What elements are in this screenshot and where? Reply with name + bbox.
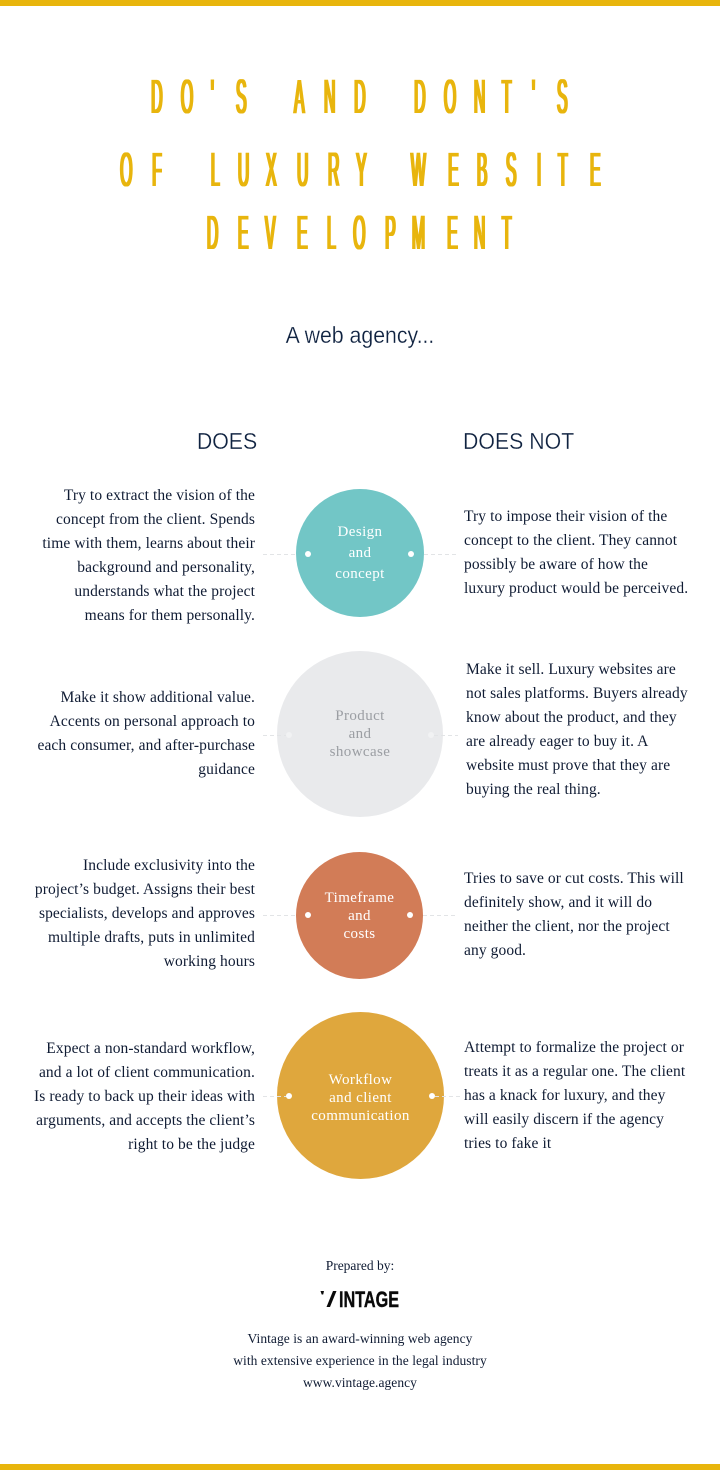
subtitle: A web agency... (286, 322, 434, 348)
row 2 right text (466, 661, 688, 798)
row 3 left text: multiple drafts, puts in unlimited (48, 929, 255, 946)
title: OFLUXURYWEBSITE (120, 143, 601, 197)
row 4 right text: Attempt to formalize the project or (464, 1039, 684, 1056)
row 1 circle: and (349, 545, 371, 561)
footer text: Vintage is an award-winning web agency (248, 1331, 472, 1346)
heading: does: DOES (197, 428, 257, 454)
row 2 circle (277, 651, 443, 817)
row 4 left text: arguments, and accepts the client’s (36, 1112, 255, 1129)
row 2 circle: Product (335, 708, 385, 724)
row 4 right text: tries to fake it (464, 1135, 551, 1152)
row 3 left text (35, 857, 255, 970)
prepared by: Prepared by: (326, 1258, 394, 1273)
row 1 right text: luxury product would be perceived. (464, 580, 688, 597)
row 3 circle: and (348, 908, 371, 924)
row 3 right text: any good. (464, 942, 526, 959)
row 4 right text: will easily discern if the agency (464, 1111, 664, 1128)
row 4 circle: communication (311, 1108, 410, 1124)
row 2 left text: Accents on personal approach to (50, 713, 255, 730)
row 4 right text: has a knack for luxury, and they (464, 1087, 665, 1104)
row 2 left text: guidance (198, 761, 255, 778)
row 2 right text: buying the real thing. (466, 781, 601, 798)
row 3 right text: definitely show, and it will do (464, 894, 652, 911)
row 3 left text: Include exclusivity into the (83, 857, 255, 874)
row 3 circle (296, 852, 423, 979)
row 1 right text: possibly be aware of how the (464, 556, 648, 573)
row 4 circle: Workflow (329, 1072, 392, 1088)
row 2 left text: each consumer, and after-purchase (37, 737, 255, 754)
row 2 circle: and (349, 726, 371, 742)
top bar (0, 0, 720, 6)
title (120, 70, 601, 260)
row 1 right text: concept to the client. They cannot (464, 532, 677, 549)
row 1 circle (296, 489, 424, 617)
row 3 circle: Timeframe (325, 890, 394, 906)
row 4 right text: treats it as a regular one. The client (464, 1063, 685, 1080)
row 4 left text: Expect a non-standard workflow, (46, 1040, 255, 1057)
footer text: www.vintage.agency (303, 1375, 417, 1390)
row 4 left text (34, 1040, 255, 1153)
row 3 left text: working hours (164, 953, 255, 970)
row 3 right text: Tries to save or cut costs. This will (464, 870, 684, 887)
row 1 right text (464, 508, 688, 597)
row 2 right text: are already eager to buy it. A (466, 733, 648, 750)
row 2 left text (37, 689, 255, 778)
row 1 left text: time with them, learns about their (42, 535, 255, 552)
row 3 right text: neither the client, nor the project (464, 918, 670, 935)
footer text: with extensive experience in the legal industry (233, 1353, 487, 1368)
row 2 right text: website must prove that they are (466, 757, 670, 774)
row 1 left text: concept from the client. Spends (56, 511, 255, 528)
row 4 circle (277, 1012, 444, 1179)
row 4 circle: and client (329, 1090, 392, 1106)
row 3 left text: project’s budget. Assigns their best (35, 881, 255, 898)
title: DEVELOPMENT (207, 206, 512, 260)
row 4 left text: right to be the judge (128, 1136, 255, 1153)
row 1 left text: means for them personally. (85, 607, 255, 624)
row 1 left text: background and personality, (77, 559, 255, 576)
footer text (233, 1331, 487, 1390)
row 4 left text: Is ready to back up their ideas with (34, 1088, 255, 1105)
row 2 right text: Make it sell. Luxury websites are (466, 661, 676, 678)
row 2 circle: showcase (330, 744, 390, 760)
row 1 circle: concept (335, 566, 385, 582)
row 4 left text: and a lot of client communication. (39, 1064, 255, 1081)
row 2 right text: know about the product, and they (466, 709, 677, 726)
row 4 right text (464, 1039, 686, 1152)
row 2 left text: Make it show additional value. (60, 689, 255, 706)
title: DO'SANDDONT'S (151, 70, 568, 124)
row 3 left text: specialists, develops and approves (39, 905, 255, 922)
bottom bar (0, 1464, 720, 1470)
row 1 left text: understands what the project (74, 583, 255, 600)
row 1 left text (42, 487, 255, 624)
row 3 right text (464, 870, 684, 959)
row 1 right text: Try to impose their vision of the (464, 508, 667, 525)
row 2 right text: not sales platforms. Buyers already (466, 685, 688, 702)
row 1 left text: Try to extract the vision of the (64, 487, 255, 504)
row 3 circle: costs (344, 926, 376, 942)
row 1 circle: Design (338, 524, 382, 540)
heading: does not: DOES NOT (463, 428, 574, 454)
